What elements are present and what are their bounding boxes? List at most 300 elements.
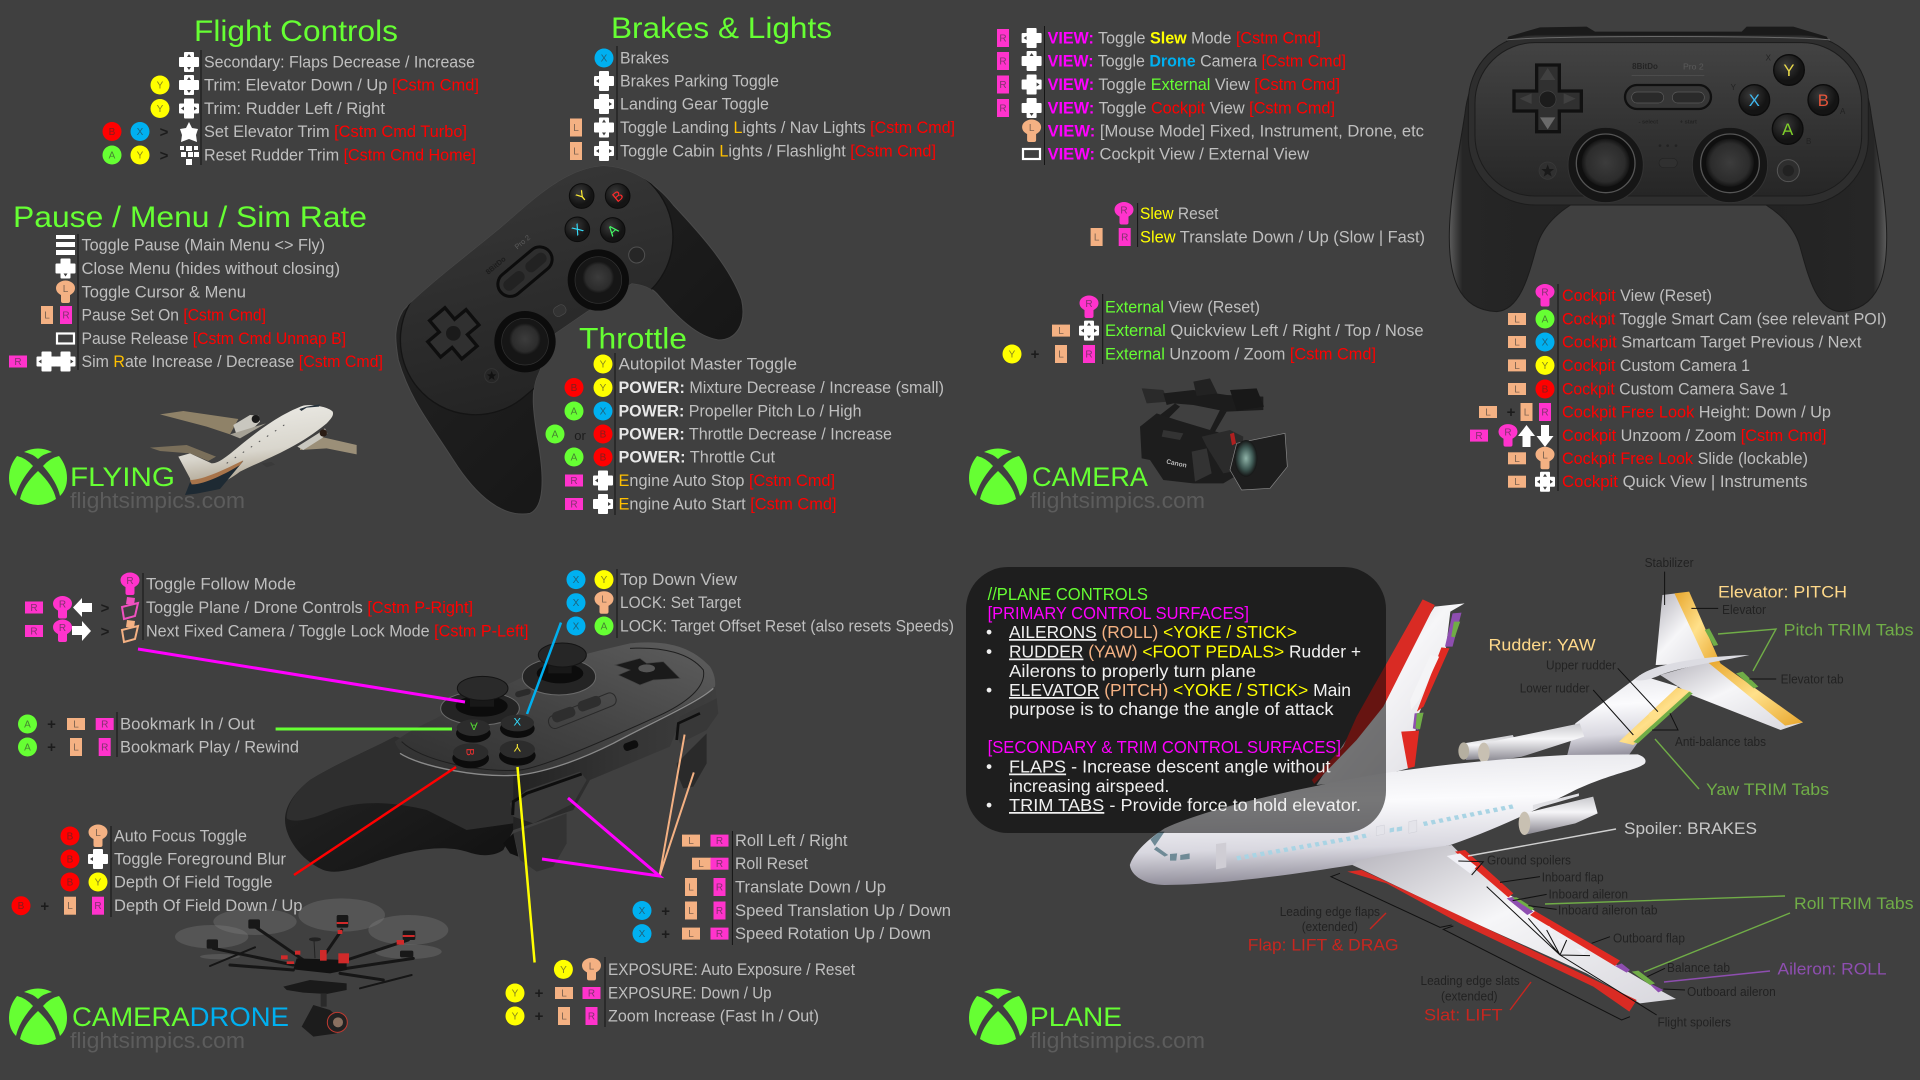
row: landing gear: Landing Gear Toggle: [620, 96, 769, 114]
row: external zoom: +: [1031, 346, 1040, 363]
controller: front view: - select: [1639, 120, 1658, 126]
row: depth of field toggle: B: [67, 878, 74, 888]
row: bookmark play: A: [24, 742, 31, 754]
row: translate down up: L: [688, 882, 694, 894]
row: cockpit view reset: Cockpit View (Reset): [1562, 287, 1712, 305]
controller: front view: B: [1806, 137, 1811, 146]
row: top down view: Top Down View: [620, 571, 737, 589]
row: free look height: L: [1524, 408, 1530, 418]
row: reset rudder trim: Y: [137, 150, 144, 162]
row: cockpit zoom: Cockpit Unzoom / Zoom [Cstm Cmd]: [1562, 427, 1826, 445]
row: engine auto stop: R: [570, 476, 578, 487]
panel: plane: [966, 555, 1914, 1053]
row: external view: VIEW: Toggle External View [Cstm Cmd]: [1048, 76, 1340, 94]
labels: control surfaces: Flap: LIFT & DRAG: [1248, 935, 1398, 954]
row: trim rudder: [150, 98, 385, 118]
flaps text: FLAPS - Increase descent angle without: [1009, 756, 1331, 776]
row: top down view: Y: [601, 575, 608, 586]
controller: angled view: X: [514, 716, 522, 728]
controller: flying view: [396, 166, 744, 514]
row: free look height: +: [1507, 404, 1516, 421]
row: bookmark play: R: [101, 742, 108, 754]
row: pause set on: Pause Set On [Cstm Cmd]: [82, 306, 266, 324]
controller: flying view: A: [604, 220, 622, 239]
row: top down view: [566, 570, 737, 589]
row: exposure down up: R: [588, 988, 595, 1000]
row: exposure down up: +: [535, 985, 544, 1002]
row: autopilot: Autopilot Master Toggle: [618, 356, 797, 374]
row: pause set on: L: [44, 310, 50, 322]
row: trim elevator: Y: [157, 80, 164, 92]
row: engine auto start: R: [570, 500, 578, 510]
row: free look height: R: [1541, 408, 1549, 418]
row: auto exposure: [554, 958, 855, 980]
labels: control surfaces: Rudder: YAW: [1488, 636, 1596, 655]
row: depth of field down up: B: [18, 901, 25, 912]
row: speed rotation: L: [688, 929, 694, 940]
row: plane drone controls: >: [101, 600, 110, 617]
row: speed rotation: X: [639, 929, 646, 940]
flaps: •: [986, 756, 992, 776]
row: slew reset: R: [1120, 206, 1128, 216]
row: depth of field down up: R: [94, 901, 102, 912]
labels: control surfaces: Aileron: ROLL: [1778, 960, 1886, 979]
row: foreground blur: B: [67, 854, 74, 866]
row: bookmark play: Bookmark Play / Rewind: [120, 738, 299, 756]
image: drone: [175, 898, 448, 1037]
labels: plane parts: Outboard aileron: [1687, 984, 1776, 999]
elevator: •: [986, 680, 992, 700]
controller: front view: X: [1766, 54, 1772, 63]
row: translate down up: Translate Down / Up: [735, 878, 886, 896]
row: auto focus: Auto Focus Toggle: [114, 828, 247, 846]
row: brakes: [594, 48, 669, 68]
box heading: //PLANE CONTROLS: [988, 584, 1148, 604]
row: zoom increase: +: [535, 1008, 544, 1025]
row: speed translation: +: [661, 903, 670, 920]
rudder text: RUDDER (YAW) <FOOT PEDALS> Rudder +: [1009, 642, 1361, 662]
row: speed translation: Speed Translation Up / Down: [735, 902, 951, 920]
row: exposure down up: L: [561, 988, 567, 1000]
row: slew translate: R: [1121, 232, 1128, 244]
row: throttle cut: POWER: Throttle Cut: [618, 448, 775, 466]
labels: plane parts: [1280, 555, 1844, 1030]
row: speed translation: L: [688, 906, 694, 917]
heading: Brakes & Lights: [611, 12, 832, 45]
row: quick view: L: [1514, 477, 1520, 488]
row: external reset: [1080, 296, 1260, 318]
controller: flying view: X: [569, 220, 587, 238]
labels: plane parts: Flight spoilers: [1658, 1014, 1731, 1030]
controller: angled view: Y: [513, 741, 521, 753]
secondary heading: [SECONDARY & TRIM CONTROL SURFACES]: [988, 737, 1341, 757]
row: throttle: B: [600, 430, 607, 440]
panel: pause menu sim rate: [9, 201, 383, 372]
row: target offset reset: LOCK: Target Offset Reset (also resets Speeds): [620, 618, 954, 636]
row: mouse mode: VIEW: [Mouse Mode] Fixed, Instrument, Drone, etc: [1048, 122, 1424, 140]
row: reset rudder trim: [102, 146, 476, 165]
row: mouse mode: L: [1029, 123, 1035, 134]
row: mixture: B: [571, 383, 578, 394]
image: jet airliner: [150, 404, 357, 495]
row: fixed camera: Next Fixed Camera / Toggle Lock Mode [Cstm P-Left]: [146, 622, 528, 640]
logo: xbox camera: [969, 448, 1027, 505]
row: smartcam target: X: [1542, 338, 1549, 348]
row: speed rotation: [632, 924, 931, 943]
row: target offset reset: X: [573, 622, 580, 632]
trim tabs: •: [986, 795, 992, 815]
labels: control surfaces: Yaw TRIM Tabs: [1706, 780, 1829, 799]
row: set elevator trim: [102, 122, 467, 142]
row: drone camera: VIEW: Toggle Drone Camera [Cstm Cmd]: [1048, 52, 1346, 70]
row: custom camera: Cockpit Custom Camera 1: [1562, 357, 1750, 375]
heading: Pause / Menu / Sim Rate: [13, 201, 367, 234]
row: free look slide: Cockpit Free Look Slide (lockable): [1562, 450, 1808, 468]
label: website: flightsimpics.com: [1030, 1028, 1205, 1053]
row: bookmark play: L: [73, 742, 79, 754]
row: depth of field down up: Depth Of Field Down / Up: [114, 897, 302, 915]
primary heading: [PRIMARY CONTROL SURFACES]: [988, 603, 1249, 623]
row: custom camera save: B: [1542, 384, 1549, 396]
arrow: B button red: [294, 767, 456, 875]
row: roll reset: [692, 855, 808, 873]
row: custom camera: Y: [1542, 361, 1549, 372]
arrows: L triggers orange: [660, 735, 694, 876]
labels: control surfaces: Roll TRIM Tabs: [1794, 894, 1914, 913]
row: auto exposure: Y: [560, 965, 567, 976]
row: lock target: LOCK: Set Target: [620, 594, 741, 612]
row: smart cam: L: [1514, 314, 1520, 326]
row: pause release: Pause Release [Cstm Cmd Unmap B]: [82, 330, 346, 348]
row: zoom increase: L: [561, 1012, 567, 1022]
arrow: Y button yellow: [518, 767, 535, 962]
row: fixed camera: R: [30, 626, 38, 638]
row: free look slide: [1508, 447, 1808, 469]
heading: Throttle: [579, 322, 687, 356]
body, tail, far wing and engines: [1130, 592, 1803, 885]
row: slew mode: VIEW: Toggle Slew Mode [Cstm Cmd]: [1048, 30, 1321, 48]
row: plane drone controls: [25, 596, 473, 619]
row: roll reset: Roll Reset: [735, 855, 808, 873]
row: free look slide: L: [1542, 450, 1548, 461]
row: sim rate: R: [14, 357, 22, 368]
row: depth of field down up: L: [67, 901, 73, 912]
heading: Flight Controls: [194, 15, 398, 48]
panel: camera drone: [9, 569, 954, 1053]
controller: front view: A: [1782, 120, 1794, 139]
panel: flying: [9, 131, 743, 514]
panel: camera: [969, 26, 1887, 513]
row: external reset: R: [1085, 299, 1093, 310]
row: external zoom: External Unzoom / Zoom [Cstm Cmd]: [1105, 346, 1376, 364]
controller: front view: Pro 2: [1683, 61, 1704, 71]
row: auto exposure: EXPOSURE: Auto Exposure / Reset: [608, 961, 855, 979]
leader lines: colored: [1370, 629, 1790, 1010]
row: brakes: X: [601, 54, 608, 64]
row: external view: R: [999, 80, 1007, 91]
row: throttle: A: [552, 430, 559, 440]
label: camera: CAMERA: [1032, 462, 1148, 492]
labels: plane parts: Upper rudder: [1546, 658, 1617, 672]
row: bookmark play: [18, 738, 299, 756]
label: website: flightsimpics.com: [1030, 488, 1205, 513]
row: external quickview: L: [1058, 326, 1064, 337]
panel: brakes and lights: [570, 12, 955, 161]
row: external zoom: Y: [1009, 350, 1016, 360]
row: exposure down up: [506, 984, 772, 1002]
row: foreground blur: [60, 849, 287, 869]
row: cockpit view reset: [1536, 284, 1712, 306]
row: set elevator trim: Set Elevator Trim [Cstm Cmd Turbo]: [204, 123, 467, 141]
labels: plane parts: (extended): [1302, 919, 1358, 934]
row: auto focus: B: [67, 832, 74, 842]
row: target offset reset: A: [601, 622, 608, 632]
row: landing lights: Toggle Landing Lights / Nav Lights [Cstm Cmd]: [620, 119, 955, 137]
rudder: •: [986, 642, 992, 662]
row: toggle cursor: Toggle Cursor & Menu: [82, 284, 246, 302]
controller: front view: [1449, 27, 1887, 312]
callout: plane controls box: [966, 567, 1386, 833]
image: camcorder: [1140, 378, 1287, 490]
row: zoom increase: R: [588, 1012, 595, 1022]
row: custom camera save: L: [1514, 384, 1520, 396]
ailerons: AILERONS (ROLL) <YOKE / STICK>: [1009, 622, 1297, 642]
row: speed translation: R: [716, 906, 723, 917]
row: throttle: or: [574, 428, 586, 443]
row: brakes: Brakes: [620, 50, 669, 68]
row: bookmark in out: [18, 714, 255, 734]
label: camera drone: CAMERADRONE: [72, 1002, 289, 1032]
label: plane: PLANE: [1030, 1002, 1122, 1032]
labels: plane parts: Leading edge slats: [1420, 973, 1520, 988]
logo: xbox plane: [969, 988, 1027, 1045]
logo: xbox flying: [9, 448, 67, 505]
row: fixed camera: R: [59, 623, 66, 634]
row: follow mode: Toggle Follow Mode: [146, 576, 296, 594]
row: throttle cut: B: [600, 452, 607, 464]
controller: front view: Y: [1731, 83, 1737, 92]
row: secondary flaps: Secondary: Flaps Decrease / Increase: [204, 54, 475, 72]
row: reset rudder trim: A: [109, 150, 116, 162]
row: external reset: External View (Reset): [1105, 298, 1260, 316]
row: propeller: X: [600, 406, 607, 418]
row: trim elevator: Trim: Elevator Down / Up [Cstm Cmd]: [204, 76, 479, 94]
row: autopilot: Y: [600, 360, 607, 370]
labels: control surfaces: Slat: LIFT: [1424, 1006, 1503, 1024]
row: engine auto start: Engine Auto Start [Cstm Cmd]: [618, 496, 836, 514]
row: custom camera: L: [1514, 361, 1520, 372]
labels: control surfaces: Pitch TRIM Tabs: [1784, 620, 1914, 640]
row: zoom increase: [506, 1006, 819, 1026]
row: zoom increase: Y: [512, 1012, 519, 1022]
row: slew translate: L: [1094, 232, 1100, 244]
row: throttle cut: A: [571, 452, 578, 464]
row: external zoom: L: [1058, 350, 1064, 360]
labels: plane parts: Inboard aileron: [1548, 886, 1628, 902]
row: speed rotation: R: [716, 929, 723, 940]
controller: flying view: B: [609, 187, 626, 205]
row: zoom increase: Zoom Increase (Fast In / Out): [608, 1008, 819, 1026]
controller: angled view: B: [464, 748, 476, 756]
row: roll reset: R: [716, 859, 723, 870]
row: exposure down up: Y: [512, 988, 519, 1000]
row: plane drone controls: Toggle Plane / Drone Controls [Cstm P-Right]: [146, 599, 473, 617]
row: roll left right: L: [688, 836, 694, 847]
row: set elevator trim: B: [109, 127, 116, 138]
row: throttle: POWER: Throttle Decrease / Increase: [618, 426, 892, 444]
row: free look slide: L: [1514, 454, 1520, 465]
row: bookmark in out: R: [101, 720, 108, 730]
row: roll left right: Roll Left / Right: [735, 832, 848, 850]
labels: plane parts: Stabilizer: [1645, 555, 1694, 570]
row: fixed camera: [25, 620, 528, 642]
controller: flying view: Pro 2: [513, 233, 532, 251]
arrow: A button green: [276, 728, 452, 730]
labels: plane parts: (extended): [1441, 988, 1498, 1004]
row: lock target: X: [573, 598, 580, 609]
arrow: X button blue: [527, 623, 561, 714]
arrows: R triggers magenta: [542, 798, 660, 876]
row: free look height: L: [1485, 408, 1491, 418]
row: plane drone controls: R: [30, 603, 38, 614]
label: website: flightsimpics.com: [70, 488, 245, 513]
row: parking brake: Brakes Parking Toggle: [620, 72, 779, 90]
label: website: flightsimpics.com: [70, 1028, 245, 1053]
labels: control surfaces: [1248, 583, 1914, 1024]
row: follow mode: R: [126, 576, 134, 587]
row: auto exposure: L: [589, 961, 595, 972]
row: depth of field down up: +: [40, 898, 49, 915]
row: trim rudder: Trim: Rudder Left / Right: [204, 100, 385, 118]
row: top down view: X: [573, 575, 580, 586]
row: cockpit view: VIEW: Toggle Cockpit View [Cstm Cmd]: [1048, 100, 1335, 118]
row: lock target: L: [601, 595, 607, 606]
row: set elevator trim: >: [160, 124, 169, 141]
controller: flying view: Y: [573, 186, 591, 205]
row: quick view: Cockpit Quick View | Instruments: [1562, 473, 1808, 491]
row: foreground blur: Toggle Foreground Blur: [114, 850, 287, 868]
row: depth of field down up: [12, 896, 302, 915]
row: roll left right: [682, 832, 848, 850]
row: bookmark in out: Bookmark In / Out: [120, 716, 255, 734]
row: speed translation: X: [639, 906, 646, 917]
row: free look height: Cockpit Free Look Height: Down / Up: [1562, 404, 1831, 422]
logo: xbox drone: [9, 988, 67, 1045]
diagram: airplane: [1130, 572, 1803, 1020]
controller: front view: Y: [1783, 61, 1795, 80]
row: set elevator trim: X: [137, 127, 144, 138]
elevator text 2: purpose is to change the angle of attack: [1009, 699, 1334, 719]
panel: throttle: [546, 322, 944, 515]
labels: control surfaces: Elevator: PITCH: [1718, 583, 1847, 602]
labels: plane parts: Ground spoilers: [1487, 852, 1571, 868]
panel: flight controls: [102, 15, 479, 165]
row: speed translation: [632, 901, 951, 920]
row: slew mode: R: [999, 34, 1007, 44]
row: smart cam: Cockpit Toggle Smart Cam (see relevant POI): [1562, 310, 1886, 328]
bullets: •: [986, 622, 992, 642]
row: plane drone controls: R: [59, 600, 66, 610]
controller: front view: + start: [1680, 120, 1697, 126]
row: toggle pause: Toggle Pause (Main Menu <> Fly): [82, 236, 325, 254]
row: roll reset: L: [698, 859, 704, 870]
row: bookmark play: +: [47, 739, 56, 756]
labels: plane parts: Lower rudder: [1520, 680, 1590, 696]
rudder text 2: Ailerons to properly turn plane: [1009, 661, 1256, 681]
row: drone camera: R: [999, 56, 1007, 68]
row: roll left right: R: [716, 836, 723, 847]
row: follow mode: [120, 572, 296, 595]
row: custom camera save: Cockpit Custom Camera Save 1: [1562, 380, 1788, 398]
row: speed rotation: Speed Rotation Up / Down: [735, 925, 931, 943]
row: cockpit external: VIEW: Cockpit View / External View: [1048, 146, 1309, 164]
controller: angled view: [285, 642, 718, 872]
near wing: [1331, 845, 1685, 1020]
label: flying: FLYING: [70, 462, 175, 492]
labels: plane parts: Leading edge flaps: [1280, 904, 1380, 919]
row: toggle cursor: [56, 280, 246, 303]
row: mixture: POWER: Mixture Decrease / Increase (small): [618, 379, 944, 397]
row: bookmark in out: +: [47, 716, 56, 733]
row: translate down up: R: [716, 882, 723, 894]
row: pause set on: R: [62, 310, 70, 322]
row: cockpit zoom: R: [1504, 428, 1512, 439]
row: slew translate: Slew Translate Down / Up (Slow | Fast): [1140, 228, 1425, 246]
labels: plane parts: Inboard flap: [1542, 870, 1604, 884]
row: lock target: [566, 591, 741, 614]
labels: plane parts: Inboard aileron tab: [1558, 902, 1658, 918]
row: cabin lights: Toggle Cabin Lights / Flashlight [Cstm Cmd]: [620, 142, 936, 160]
labels: plane parts: Elevator tab: [1781, 672, 1844, 686]
row: cockpit view: R: [999, 104, 1007, 114]
row: external zoom: [1002, 344, 1376, 364]
row: auto focus: L: [95, 828, 101, 839]
trim tabs text: TRIM TABS - Provide force to hold elevator.: [1009, 795, 1361, 815]
row: close menu: Close Menu (hides without closing): [82, 260, 340, 278]
row: slew reset: Slew Reset: [1140, 205, 1219, 223]
row: propeller: POWER: Propeller Pitch Lo / High: [618, 402, 862, 420]
controller: front view: X: [1749, 91, 1760, 110]
row: speed rotation: +: [661, 926, 670, 943]
row: cabin lights: L: [573, 146, 579, 158]
row: toggle cursor: L: [63, 284, 69, 295]
elevator text: ELEVATOR (PITCH) <YOKE / STICK> Main: [1009, 680, 1351, 700]
labels: plane parts: Elevator: [1722, 602, 1767, 617]
row: slew reset: [1114, 202, 1219, 224]
row: cockpit zoom: [1470, 424, 1826, 447]
controller: front view: A: [1840, 107, 1846, 116]
row: cockpit view reset: R: [1541, 288, 1549, 298]
row: smartcam target: L: [1514, 338, 1520, 348]
row: trim rudder: Y: [157, 104, 164, 115]
row: cockpit zoom: R: [1475, 431, 1483, 442]
row: reset rudder trim: Reset Rudder Trim [Cstm Cmd Home]: [204, 146, 476, 164]
row: propeller: A: [571, 406, 578, 418]
row: landing lights: L: [573, 123, 579, 134]
row: reset rudder trim: >: [160, 148, 169, 164]
row: depth of field toggle: Y: [95, 878, 102, 888]
arrow: right stick magenta: [138, 649, 465, 702]
row: mixture: Y: [600, 383, 607, 394]
row: exposure down up: EXPOSURE: Down / Up: [608, 984, 772, 1002]
row: external quickview: External Quickview Left / Right / Top / Nose: [1105, 322, 1424, 340]
row: bookmark in out: L: [73, 720, 79, 730]
controller: front view: 8BitDo: [1632, 62, 1658, 71]
callout lines: tail: [1593, 572, 1776, 735]
row: external zoom: R: [1085, 350, 1093, 360]
row: sim rate: Sim Rate Increase / Decrease [Cstm Cmd]: [82, 353, 383, 371]
labels: plane parts: Balance tab: [1667, 960, 1730, 975]
